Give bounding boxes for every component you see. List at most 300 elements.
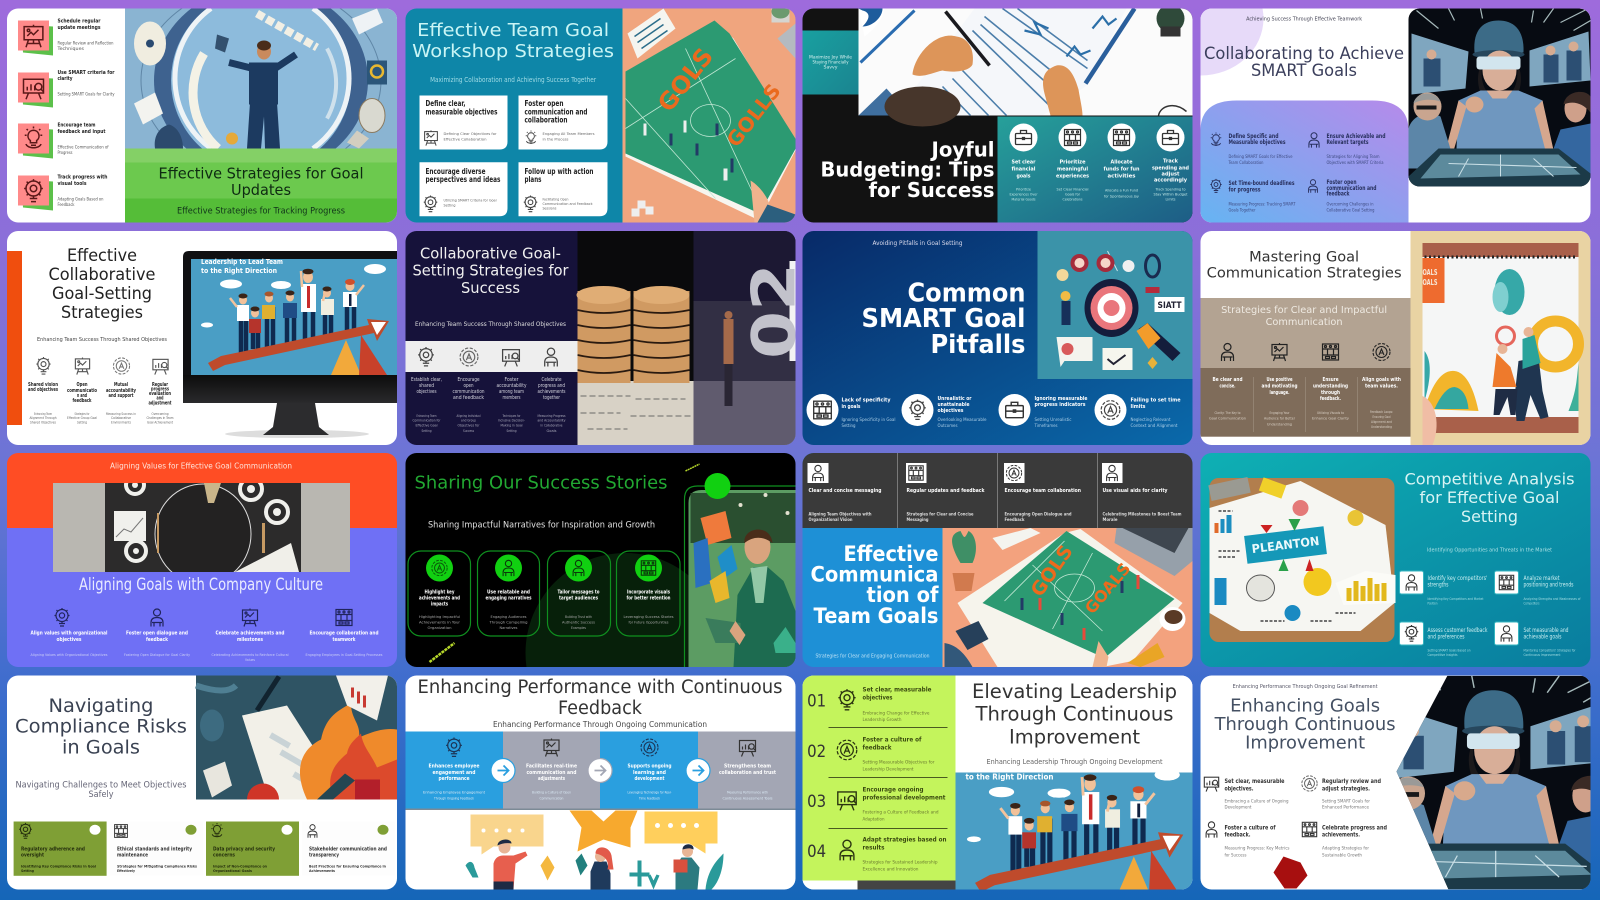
- four value columns: Foster open dialogue and: [126, 631, 188, 637]
- box: Follow up with action plans: Communication and Feedback: [542, 202, 593, 206]
- green title band: [125, 148, 397, 222]
- column text: Encourage: [458, 377, 480, 383]
- item: Schedule regular update meetings: Techniques: [56, 46, 84, 51]
- four-step process band: Leveraging Technology for Real-: [628, 790, 672, 794]
- column text: Goals: [546, 429, 557, 433]
- panel: Effective Collaborative Goal-Setting Strategies: [7, 231, 397, 445]
- panel: four budgeting tips: Track Spending to: [1155, 186, 1186, 192]
- caption box: Maximize Joy While: [809, 54, 852, 60]
- lime numbered list: Leadership Development: [862, 766, 914, 772]
- column text: achievements: [538, 389, 566, 395]
- analysis items: Set measurable and: [1524, 627, 1569, 634]
- kicker: Aligning Values for Effective Goal Communication: [110, 461, 292, 470]
- column text: Aligning Individual: [456, 414, 480, 418]
- pitfall items: unattainable: [938, 402, 970, 408]
- photo: wooden coin stacks and 02: 02: [740, 263, 810, 359]
- item: Schedule regular update meetings: Schedule regular: [58, 18, 101, 24]
- title: [48, 246, 156, 323]
- caption box: Staying Financially: [812, 60, 849, 66]
- story card 4: [616, 551, 680, 636]
- box: Follow up with action plans: Sessions: [542, 206, 557, 210]
- title: SMART Goal: [862, 304, 1026, 334]
- gradient content panel: Objectives with SMART Criteria: [1326, 160, 1384, 165]
- subtitle: Safely: [88, 790, 114, 800]
- subtitle: [16, 780, 187, 800]
- title: SMART Goals: [1251, 61, 1357, 81]
- item: Track progress with visual tools: Feedback: [58, 202, 75, 207]
- four-step process band: development: [634, 776, 665, 782]
- gradient content panel: for progress: [1228, 186, 1261, 194]
- column text: objectives: [416, 389, 437, 395]
- four strategy columns: Collaborative: [111, 416, 131, 420]
- four strategy columns: [28, 357, 174, 424]
- gradient content panel: Goals Together: [1228, 208, 1256, 212]
- four strategy columns: Mutual: [114, 382, 128, 388]
- card: Ethical standards and integrity maintenance: [110, 822, 203, 876]
- panel: four budgeting tips: experiences: [1056, 174, 1090, 180]
- caption box: Savvy: [824, 64, 838, 70]
- lime numbered list: feedback: [862, 744, 892, 752]
- story card 3: Tailor messages to: [558, 590, 600, 596]
- four-step process band: Enhancing Employee Engagement: [423, 790, 485, 794]
- story card 2: Narratives: [500, 626, 518, 630]
- story card 3: Building Trust with: [565, 615, 593, 619]
- gradient content panel: Ensure Achievable and: [1326, 133, 1386, 140]
- title: Navigating: [48, 695, 154, 717]
- title: Compliance Risks: [15, 716, 187, 738]
- analysis items: strengths: [1428, 582, 1448, 588]
- lime numbered list: 04: [807, 842, 826, 862]
- column text: Enhancing Team: [416, 414, 437, 418]
- title: [1214, 696, 1396, 754]
- illustration: team on arrow: [956, 763, 1192, 897]
- panel: four budgeting tips: accordingly: [1154, 178, 1187, 184]
- story card 2: [478, 551, 540, 636]
- gradient content panel: communication and: [1326, 185, 1376, 192]
- title: Budgeting: Tips: [820, 158, 994, 182]
- lime numbered list: results: [862, 844, 885, 852]
- story card 1: Organization: [428, 626, 452, 630]
- four strategy columns: Regular: [152, 382, 168, 388]
- story card 1: [408, 551, 470, 636]
- four improvement items: Foster a culture of: [1224, 826, 1276, 832]
- photo: wooden coin stacks and 02: [576, 231, 810, 445]
- story card 2: Through Compelling: [488, 620, 528, 624]
- subtitle: Enhancing Team Success Through Shared Objectives: [415, 320, 567, 328]
- card: Ethical standards and integrity maintenance: Ethical standards and integrity: [117, 846, 192, 852]
- title: Effective Strategies for Goal: [158, 164, 364, 182]
- column text: Foster: [504, 377, 519, 383]
- gradient content panel: Strategies for Aligning Team: [1326, 154, 1380, 159]
- card: Data privacy and security concerns: Organizational Goals: [213, 868, 253, 873]
- title: Goal-Setting: [52, 284, 152, 304]
- brown band with four columns: and motivating: [1262, 384, 1298, 390]
- four value columns: Aligning Values with Organizational Objectives: [30, 652, 108, 657]
- four value columns: Engaging Employees in Goal-Setting Processes: [306, 652, 383, 657]
- card: Stakeholder communication and transparency: [302, 822, 395, 876]
- four improvement items: Setting SMART Goals for: [1322, 798, 1370, 804]
- box: Encourage diverse perspectives and ideas: Encourage diverse: [426, 167, 486, 176]
- brown band with four columns: feedback.: [1320, 396, 1341, 402]
- box: Foster open communication and collaboration: in the Process: [542, 136, 569, 142]
- column text: Measuring Progress: [538, 414, 566, 418]
- column text: together: [543, 395, 561, 401]
- title: tion of: [866, 583, 939, 607]
- panel: four budgeting tips: Stay Within Budget: [1154, 192, 1188, 196]
- lime numbered list: Excellence and Innovation: [862, 866, 919, 872]
- illustration: goals pitch: GOLLS: [722, 79, 786, 152]
- column text: Inclusive Decision-: [498, 418, 526, 422]
- card: Regulatory adherence and oversight: Setting: [21, 868, 34, 873]
- four-step process band: Facilitates real-time: [526, 764, 577, 770]
- four value columns: Encourage collaboration and: [310, 631, 379, 637]
- orange accent bar: [7, 251, 22, 425]
- dark header strip with four columns: Aligning Team Objectives with: [808, 512, 872, 517]
- title: Improvement: [1009, 726, 1140, 748]
- title: [810, 542, 939, 628]
- title: [1207, 250, 1402, 282]
- title: Strategies: [61, 303, 143, 323]
- card: Data privacy and security concerns: Data privacy and security: [213, 846, 275, 852]
- column text: in Collaborative: [540, 424, 563, 428]
- pitfall items: objectives: [938, 408, 964, 414]
- gradient content panel: Define Specific and: [1228, 133, 1278, 140]
- brown band with four columns: language.: [1270, 390, 1290, 396]
- four strategy columns: Strategies for: [74, 412, 90, 416]
- panel: four budgeting tips: Limits: [1166, 196, 1176, 202]
- box: Encourage diverse perspectives and ideas: Setting: [444, 202, 456, 208]
- item: Use SMART criteria for clarity: [18, 70, 115, 108]
- four value columns: milestones: [237, 637, 264, 643]
- item: Schedule regular update meetings: update meetings: [58, 25, 101, 31]
- four improvement items: Development: [1224, 804, 1252, 810]
- box: Define clear, measurable objectives: [420, 96, 508, 150]
- title: [15, 695, 187, 758]
- panel: four budgeting tips: for Spontaneous Joy: [1104, 194, 1140, 198]
- column text: Success: [463, 429, 474, 433]
- story card 1: Highlighting Impactful: [419, 615, 460, 619]
- brown band with four columns: concise.: [1220, 384, 1236, 390]
- title: Collaborative Goal-: [420, 244, 561, 262]
- four improvement items: Enhanced Performance: [1322, 804, 1370, 810]
- four strategy columns: Shared Objectives: [30, 420, 56, 424]
- kicker: Achieving Success Through Effective Teamwork: [1246, 16, 1363, 22]
- story card 4: Leveraging Success Stories: [624, 615, 674, 619]
- illustration: compliance paper on fire: [196, 676, 397, 800]
- illustration: magnifier and target: [1038, 231, 1192, 379]
- four strategy columns: adjustment: [148, 400, 172, 406]
- brown band with four columns: Alignment and: [1371, 420, 1392, 424]
- four strategy columns: feedback: [72, 398, 92, 404]
- brown band with four columns: Be clear and: [1212, 377, 1243, 383]
- gradient content panel: Foster open: [1326, 179, 1356, 186]
- illustration: goals pitch on desk: GOLS: [1027, 541, 1078, 601]
- lime numbered list: 02: [807, 742, 826, 762]
- four value columns: Align values with organizational: [30, 631, 108, 637]
- panel: Joyful Budgeting: [802, 4, 1192, 222]
- box: Follow up with action plans: Follow up with action: [524, 167, 594, 176]
- lime numbered list: objectives: [862, 694, 893, 702]
- card: Stakeholder communication and transparency: transparency: [309, 852, 339, 858]
- lime numbered list: Foster a culture of: [862, 736, 922, 744]
- photo: woman with futuristic helmet: [1408, 8, 1590, 186]
- four value columns: teamwork: [332, 637, 356, 643]
- four improvement items: Adapting Strategies for: [1322, 846, 1369, 850]
- pitfall items: Setting: [842, 423, 856, 428]
- subtitle: Enhancing Performance Through Ongoing Communication: [493, 720, 707, 729]
- analysis items: Identifying Key Competitors and Market: [1428, 597, 1484, 601]
- pitfall items: Neglecting Relevant: [1130, 417, 1171, 422]
- brown band with four columns: Use positive: [1266, 377, 1293, 383]
- title: Effective: [844, 542, 938, 566]
- four improvement items: Regularly review and: [1322, 779, 1381, 785]
- panel: Effective Communication of Team Goals: [802, 453, 1192, 667]
- title: for Success: [868, 178, 994, 202]
- panel: four budgeting tips: spending and: [1152, 166, 1189, 172]
- illustration: goals pitch on desk: GOALS: [1081, 559, 1134, 618]
- story card 1: impacts: [431, 602, 448, 608]
- column text: shared: [419, 383, 434, 389]
- four-step process band: Through Ongoing Feedback: [433, 796, 475, 800]
- column text: open: [464, 383, 474, 389]
- title: Mastering Goal: [1249, 250, 1359, 266]
- pitfall items: in goals: [842, 404, 861, 410]
- lime numbered list: 03: [807, 792, 826, 812]
- card: Data privacy and security concerns: concerns: [213, 852, 236, 858]
- gradient content panel: Overcoming Challenges in: [1326, 202, 1374, 206]
- column text: progress and: [538, 383, 565, 389]
- notebook illustration on beige: OALS: [1422, 268, 1438, 277]
- story card 3: Examples: [571, 626, 586, 630]
- lime numbered list: Encourage ongoing: [862, 786, 924, 794]
- pitfall items: Lack of specificity: [842, 398, 891, 404]
- photo: target flat lay: [53, 476, 350, 584]
- subtitle: Identifying Opportunities and Threats in the Market: [1427, 548, 1553, 554]
- four strategy columns: Alignment Through: [30, 416, 56, 420]
- panel: Effective Strategies for Goal Updates: [7, 0, 397, 222]
- story card 2: Engaging Audiences: [490, 615, 527, 619]
- lime numbered list: Set clear, measurable: [862, 686, 932, 694]
- title: Elevating Leadership: [972, 680, 1177, 703]
- brown band with four columns: Understanding: [1371, 425, 1392, 429]
- card: Regulatory adherence and oversight: oversight: [21, 852, 44, 858]
- panel: four budgeting tips: Allocate a Fun Fund: [1105, 188, 1139, 192]
- four improvement items: achievements.: [1322, 832, 1360, 838]
- column text: Celebrate: [542, 377, 562, 383]
- four-step process band: Building a Culture of Open: [532, 790, 571, 794]
- title: Pitfalls: [930, 330, 1026, 360]
- four-step process band: engagement and: [432, 770, 476, 776]
- item: Track progress with visual tools: Adapting Goals Based on: [58, 196, 104, 202]
- column text: Making in Goal: [500, 424, 523, 428]
- icon strip: [406, 341, 578, 372]
- title: [418, 677, 782, 719]
- desktop monitor with team illustration: [183, 251, 397, 438]
- four improvement items: Measuring Progress: Key Metrics: [1224, 846, 1290, 850]
- story card 4: for Future Opportunities: [628, 620, 669, 624]
- brown band with four columns: Feedback Loops:: [1370, 410, 1393, 414]
- panel: four budgeting tips: funds for fun: [1104, 166, 1140, 172]
- lime numbered list: [802, 676, 956, 880]
- brown band with four columns: Engaging Your: [1270, 411, 1290, 415]
- dark header strip with four columns: Regular updates and feedback: [906, 488, 985, 494]
- title: Workshop Strategies: [412, 41, 614, 62]
- analysis items: Competitive Insights: [1428, 653, 1458, 657]
- four-step process band: Time Feedback: [638, 796, 661, 800]
- title: Communication Strategies: [1207, 266, 1402, 282]
- panel: four budgeting tips: Material Goods: [1012, 196, 1036, 202]
- item: Track progress with visual tools: Track progress with: [58, 174, 108, 180]
- card: Regulatory adherence and oversight: Identifying Key Compliance Risks in Goal: [21, 864, 96, 868]
- brown band with four columns: Enhance Goal Clarity: [1312, 416, 1350, 420]
- title: Effective: [67, 246, 137, 266]
- title: Updates: [231, 181, 291, 199]
- panel: four budgeting tips: Prioritize: [1060, 160, 1086, 166]
- pitfall items: limits: [1130, 404, 1146, 410]
- lime numbered list: Leadership Growth: [862, 717, 902, 722]
- card: Ethical standards and integrity maintenance: Strategies for Mitigating Compliance Risks: [117, 864, 198, 868]
- gradient content panel: Measuring Progress: Tracking SMART: [1228, 202, 1296, 206]
- four-step process band: learning and: [633, 770, 666, 776]
- pitfall items: [806, 394, 1181, 428]
- box: Define clear, measurable objectives: Effective Collaboration: [444, 136, 487, 142]
- analysis items: Analyze market: [1524, 575, 1560, 582]
- column text: Communication for: [412, 418, 441, 422]
- four strategy columns: communicatio: [67, 388, 98, 394]
- column text: members: [502, 395, 521, 401]
- panel: four budgeting tips: Experiences Over: [1010, 192, 1038, 196]
- four strategy columns: Environments: [111, 420, 131, 424]
- four strategy columns: and objectives: [28, 387, 58, 393]
- box: Foster open communication and collaboration: [518, 96, 608, 150]
- four strategy columns: n and: [77, 393, 87, 399]
- four strategy columns: Overcoming: [152, 412, 168, 416]
- title: Feedback: [558, 698, 642, 719]
- dark header strip with four columns: Messaging: [906, 517, 929, 522]
- four-step process band: Continuous Assessment Tools: [722, 796, 773, 800]
- story card 3: target audiences: [559, 596, 598, 602]
- column text: Setting: [422, 429, 432, 433]
- caption box: [802, 30, 858, 94]
- item: Schedule regular update meetings: [18, 18, 114, 56]
- panel: four budgeting tips: Prioritize: [1016, 186, 1032, 192]
- box: Follow up with action plans: [518, 162, 608, 216]
- card: Stakeholder communication and transparency: Stakeholder communication and: [309, 846, 387, 852]
- title: Aligning Goals with Company Culture: [79, 575, 323, 594]
- title: Enhancing Goals: [1230, 696, 1380, 716]
- four improvement items: [1204, 776, 1387, 858]
- item: Encourage team feedback and input: Effective Communication of: [58, 144, 109, 150]
- four value columns: feedback: [146, 637, 168, 643]
- dark header strip with four columns: Feedback: [1004, 517, 1025, 522]
- four strategy columns: and: [156, 396, 164, 402]
- four improvement items: Celebrate progress and: [1322, 826, 1387, 832]
- analysis items: [1400, 571, 1581, 657]
- pitfall items: Setting Unrealistic: [1034, 417, 1072, 422]
- lime numbered list: Fostering a Culture of Feedback and: [862, 810, 939, 814]
- title: [412, 20, 614, 62]
- illustration: man at target ring: [125, 8, 397, 148]
- title: [1404, 469, 1574, 526]
- photo: PLEANTON mind map: PLEANTON: [1251, 534, 1320, 556]
- subtitle: Effective Strategies for Tracking Progress: [177, 206, 346, 216]
- panel: four budgeting tips: meaningful: [1057, 166, 1088, 172]
- title: Common: [908, 279, 1026, 309]
- title: [822, 141, 994, 198]
- item: Track progress with visual tools: visual tools: [58, 181, 87, 187]
- brown band with four columns: through: [1321, 390, 1340, 396]
- gradient content panel: Relevant targets: [1326, 139, 1369, 146]
- pitfall items: Outcomes: [938, 423, 958, 428]
- orange header band: [7, 453, 397, 528]
- panel: Aligning Goals with Company Culture: [7, 453, 397, 667]
- story card 1: Achievements in Your: [419, 620, 460, 624]
- title: Team Goals: [814, 604, 938, 628]
- desktop monitor with team illustration: to the Right Direction: [201, 267, 277, 275]
- title: Success: [461, 279, 520, 297]
- subtitle: Enhancing Team Success Through Shared Objectives: [37, 337, 167, 343]
- illustration: magnifier and target: SIATT: [1158, 301, 1182, 311]
- footer blocks: [802, 880, 956, 890]
- panel: four budgeting tips: [998, 116, 1192, 222]
- four strategy columns: progress: [151, 386, 169, 392]
- kicker: Enhancing Performance Through Ongoing Goal Refinement: [1233, 684, 1378, 690]
- dark green glow: [526, 553, 726, 753]
- lime numbered list: Embracing Change for Effective: [862, 710, 930, 716]
- panel: Common SMART Goal Pitfalls: [802, 231, 1192, 445]
- four value columns: Fostering Open Dialogue for Goal Clarity: [124, 652, 191, 657]
- box: Foster open communication and collaboration: Engaging All Team Members: [542, 131, 595, 136]
- title: Joyful: [930, 138, 994, 162]
- panel: four budgeting tips: adjust: [1162, 172, 1180, 178]
- panel: Navigating Compliance Risks in Goals: [7, 676, 397, 890]
- lavender blob: [1200, 8, 1264, 76]
- four strategy columns: Effective Group Goal: [67, 416, 97, 420]
- brown band with four columns: Ensure: [1322, 377, 1339, 383]
- story card 4: for better retention: [626, 596, 671, 602]
- analysis items: and preferences: [1428, 634, 1464, 641]
- four-step process band: Communication: [540, 796, 564, 800]
- brown band with four columns: Audience for Better: [1264, 416, 1295, 420]
- pitfall items: Context and Alignment: [1130, 423, 1178, 428]
- taupe band with subtitle and icons: Communication: [1266, 317, 1343, 328]
- gradient content panel: [1200, 100, 1408, 222]
- subtitle: Strategies for Clear and Engaging Communication: [816, 654, 930, 660]
- item: Encourage team feedback and input: feedback and input: [58, 129, 106, 135]
- dark header strip with four columns: Celebrating Milestones to Boost Team: [1102, 512, 1182, 517]
- dark header strip with four columns: Morale: [1102, 517, 1118, 522]
- panel: Collaborative Goal-Setting Strategies for Success: [406, 231, 810, 445]
- four value columns: Celebrating Achievements to Reinforce Cultural: [212, 652, 288, 657]
- story card 1: Highlight key: [424, 590, 455, 596]
- dark header strip with four columns: Strategies for Clear and Concise: [906, 512, 974, 517]
- four strategy columns: Challenges in Team: [146, 416, 174, 420]
- four value columns: Celebrate achievements and: [216, 631, 285, 637]
- item: Schedule regular update meetings: Regular Review and Reflection: [58, 40, 114, 46]
- analysis items: Identify key competitors': [1428, 575, 1488, 582]
- kicker: Avoiding Pitfalls in Goal Setting: [872, 239, 962, 247]
- dark header strip with four columns: Organizational Vision: [808, 517, 853, 522]
- story card 4: Incorporate visuals: [627, 590, 670, 596]
- four-step process band: [406, 732, 796, 810]
- box: Follow up with action plans: plans: [524, 175, 542, 184]
- pitfall items: Timeframes: [1034, 423, 1058, 428]
- box: Foster open communication and collaboration: collaboration: [524, 116, 568, 124]
- item: Encourage team feedback and input: Encourage team: [58, 122, 96, 128]
- desktop monitor with team illustration: Leadership to Lead Team: [201, 258, 283, 266]
- subtitle: Maximizing Collaboration and Achieving Success Together: [430, 76, 596, 84]
- analysis items: Position: [1428, 602, 1438, 606]
